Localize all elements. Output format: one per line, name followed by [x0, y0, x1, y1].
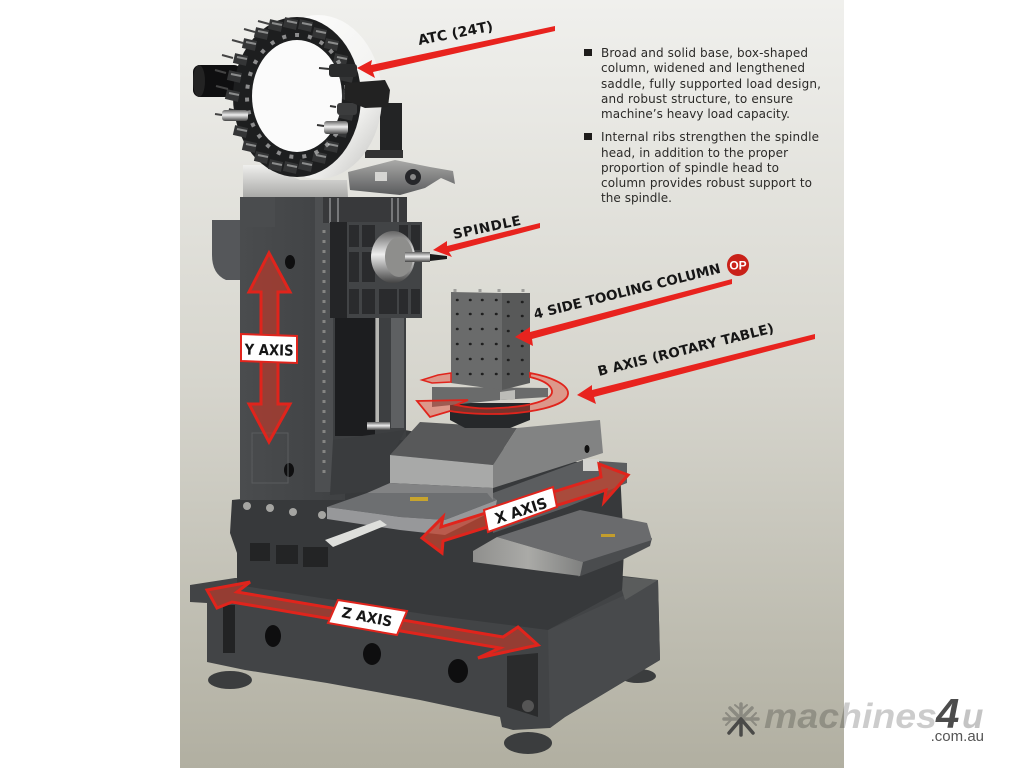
- logo numeral and u: [935, 690, 983, 737]
- logo domain: .com.au: [931, 728, 984, 745]
- white slide bar: [325, 520, 387, 547]
- spindle nose: [371, 231, 447, 283]
- logo star icon: [724, 704, 758, 735]
- badge: OP: [727, 254, 749, 276]
- bullet one: Broad and solid base, box-shaped: [601, 46, 808, 60]
- badge: OP: OP: [729, 258, 747, 272]
- logo wordmark: machines: [764, 697, 937, 736]
- rear bellows cover: [493, 460, 627, 533]
- bullet two: the spindle.: [601, 191, 672, 205]
- bullet two: column provides robust support to: [601, 176, 812, 190]
- bullet two: [584, 130, 819, 205]
- X axis arrow: [422, 464, 628, 553]
- ATC white housing: [254, 15, 382, 179]
- bullet one: and robust structure, to ensure: [601, 92, 793, 106]
- tooling column: [451, 289, 530, 390]
- label: Y AXIS: Y AXIS: [244, 340, 294, 360]
- machine illustration: [190, 15, 660, 754]
- rotary table plate: [432, 387, 548, 407]
- label: X AXIS: [484, 487, 557, 532]
- machine bed: [190, 576, 660, 754]
- background panel: [180, 0, 844, 768]
- label: Z AXIS: Z AXIS: [340, 605, 393, 631]
- table cover: [367, 420, 603, 500]
- arrow: ATC: [357, 26, 555, 78]
- saddle pockets: [250, 543, 328, 567]
- bullet one: column, widened and lengthened: [601, 61, 805, 75]
- label: SPINDLE: SPINDLE: [452, 213, 522, 243]
- logo numeral and u: u: [962, 697, 983, 736]
- right table plate: [473, 510, 652, 577]
- tool changer arm: [348, 160, 455, 195]
- ATC tool ring: [215, 17, 361, 177]
- bullet list: [584, 46, 821, 205]
- left table plate: [327, 493, 497, 535]
- arrow: tooling column: [515, 279, 732, 346]
- label: Y AXIS: [241, 334, 297, 363]
- watermark logo: [724, 690, 984, 745]
- spindle head: [323, 197, 422, 318]
- bullet one: machine’s heavy load capacity.: [601, 107, 790, 121]
- ATC support block: [243, 165, 348, 197]
- label: Z AXIS: [328, 600, 407, 635]
- rotary pedestal: [450, 403, 530, 428]
- featured tools: [215, 64, 357, 134]
- bullet one: [584, 46, 821, 121]
- bullet one: saddle, fully supported load design,: [601, 77, 821, 91]
- ATC drive mechanism: [345, 80, 390, 108]
- Y axis arrow: [241, 253, 297, 442]
- label: B AXIS (ROTARY TABLE): B AXIS (ROTARY TABLE): [596, 321, 776, 380]
- saddle: [230, 430, 624, 630]
- arrow: B axis: [577, 334, 815, 404]
- side motor: [212, 220, 240, 280]
- bullet two: proportion of spindle head to: [601, 161, 779, 175]
- label: ATC (24T): ATC (24T): [417, 19, 494, 49]
- bullet two: Internal ribs strengthen the spindle: [601, 130, 819, 144]
- rotary B axis arrow: [417, 373, 568, 417]
- column lower recess and ball screw: [330, 310, 406, 495]
- ATC column bracket: [365, 103, 403, 158]
- bolts on column foot: [243, 502, 326, 519]
- label: 4 SIDE TOOLING COLUMN: 4 SIDE TOOLING COLUMN: [532, 261, 722, 323]
- ATC motor: [193, 65, 241, 97]
- main column: [240, 197, 345, 500]
- label: X AXIS: X AXIS: [493, 494, 550, 528]
- arrow: spindle: [433, 223, 540, 257]
- bullet two: head, in addition to the proper: [601, 146, 788, 160]
- logo numeral and u: 4: [935, 690, 959, 737]
- ATC white disc: [252, 40, 342, 152]
- Z axis arrow: [207, 582, 538, 658]
